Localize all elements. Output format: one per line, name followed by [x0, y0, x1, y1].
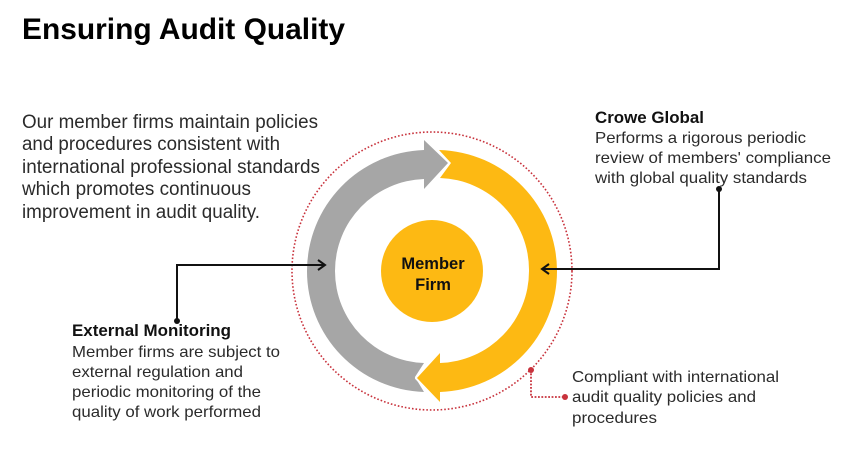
intro text block: which promotes continuous: [21, 179, 251, 200]
red dotted outer circle: [292, 132, 572, 410]
center circle: member firm: Firm: [415, 276, 451, 294]
compliance callout text: [572, 369, 779, 427]
Crowe Global text block: [594, 108, 831, 187]
connector: Crowe Global to ring: [542, 186, 722, 274]
Crowe Global text block: Performs a rigorous periodic: [595, 130, 806, 147]
External Monitoring text block: Member firms are subject to: [72, 344, 280, 361]
intro text block: [21, 112, 320, 223]
Crowe Global text block: Crowe Global: [595, 108, 704, 127]
Crowe Global text block: review of members' compliance: [595, 150, 831, 167]
External Monitoring text block: external regulation and: [72, 364, 243, 381]
External Monitoring text block: periodic monitoring of the: [72, 384, 261, 401]
compliance callout text: audit quality policies and: [572, 389, 756, 406]
center circle: member firm: [381, 220, 483, 322]
gray circular arrow: [307, 140, 448, 392]
Crowe Global text block: with global quality standards: [594, 170, 807, 187]
yellow circular arrow: [417, 150, 557, 402]
title: Ensuring Audit Quality: [22, 13, 345, 46]
compliance callout text: procedures: [572, 410, 657, 427]
External Monitoring text block: [72, 321, 280, 421]
intro text block: and procedures consistent with: [22, 134, 280, 155]
center circle: member firm: Member: [401, 255, 465, 273]
compliance callout text: Compliant with international: [572, 369, 779, 386]
connector: red dotted callout: [528, 367, 568, 400]
intro text block: improvement in audit quality.: [22, 202, 260, 223]
connector: external monitoring to ring: [174, 260, 325, 324]
intro text block: international professional standards: [22, 157, 320, 178]
External Monitoring text block: quality of work performed: [72, 404, 261, 421]
intro text block: Our member firms maintain policies: [22, 112, 318, 133]
External Monitoring text block: External Monitoring: [72, 321, 231, 340]
